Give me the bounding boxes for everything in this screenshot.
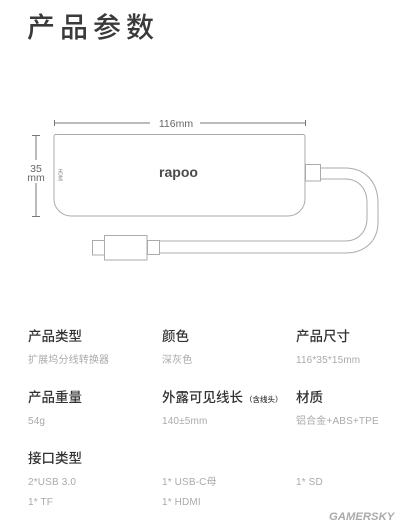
HDMI port label: HDMI xyxy=(56,169,62,181)
spec: weight: 产品重量 xyxy=(28,390,82,405)
height dimension line: 35 xyxy=(30,163,42,175)
spec: colour: 深灰色 xyxy=(162,355,192,366)
spec: cable length: 140±5mm xyxy=(162,416,207,427)
hub connector xyxy=(306,164,320,181)
spec: size: 产品尺寸 xyxy=(296,329,350,344)
ports column 2: 1* HDMI xyxy=(162,497,201,508)
hub body xyxy=(54,134,305,216)
USB-C plug xyxy=(92,236,160,260)
ports column 2: 1* USB-C母 xyxy=(162,477,217,488)
brand logo: rapoo xyxy=(159,164,198,180)
spec: weight xyxy=(28,390,82,427)
spec: cable length: 外露可见线长 （含线头） xyxy=(162,390,282,405)
spec: cable length xyxy=(162,390,282,427)
spec: colour: 颜色 xyxy=(162,329,189,344)
watermark: GAMERSKY xyxy=(329,511,394,523)
height dimension line: mm xyxy=(27,172,45,184)
spec: material xyxy=(296,390,379,427)
spec: product type xyxy=(28,329,109,366)
height dimension line xyxy=(27,136,45,216)
spec: size xyxy=(296,329,360,366)
spec: port types: 2*USB 3.0 xyxy=(28,477,76,488)
spec: product type: 产品类型 xyxy=(28,329,82,344)
spec: colour xyxy=(162,329,192,366)
cable xyxy=(160,168,378,253)
spec: size: 116*35*15mm xyxy=(296,355,360,366)
spec: material: 铝合金+ABS+TPE xyxy=(296,416,379,427)
ports column 2 xyxy=(162,476,217,508)
spec: port types: 接口类型 xyxy=(28,451,82,466)
width dimension line: 116mm xyxy=(159,118,193,130)
spec: material: 材质 xyxy=(296,390,323,405)
spec: product type: 扩展坞分线转换器 xyxy=(28,355,109,366)
spec: weight: 54g xyxy=(28,416,45,427)
spec: port types xyxy=(28,451,82,508)
width dimension line xyxy=(54,118,306,130)
ports column 3: 1* SD xyxy=(296,477,323,488)
title: 产品参数 xyxy=(27,12,159,43)
spec: port types: 1* TF xyxy=(28,497,53,508)
